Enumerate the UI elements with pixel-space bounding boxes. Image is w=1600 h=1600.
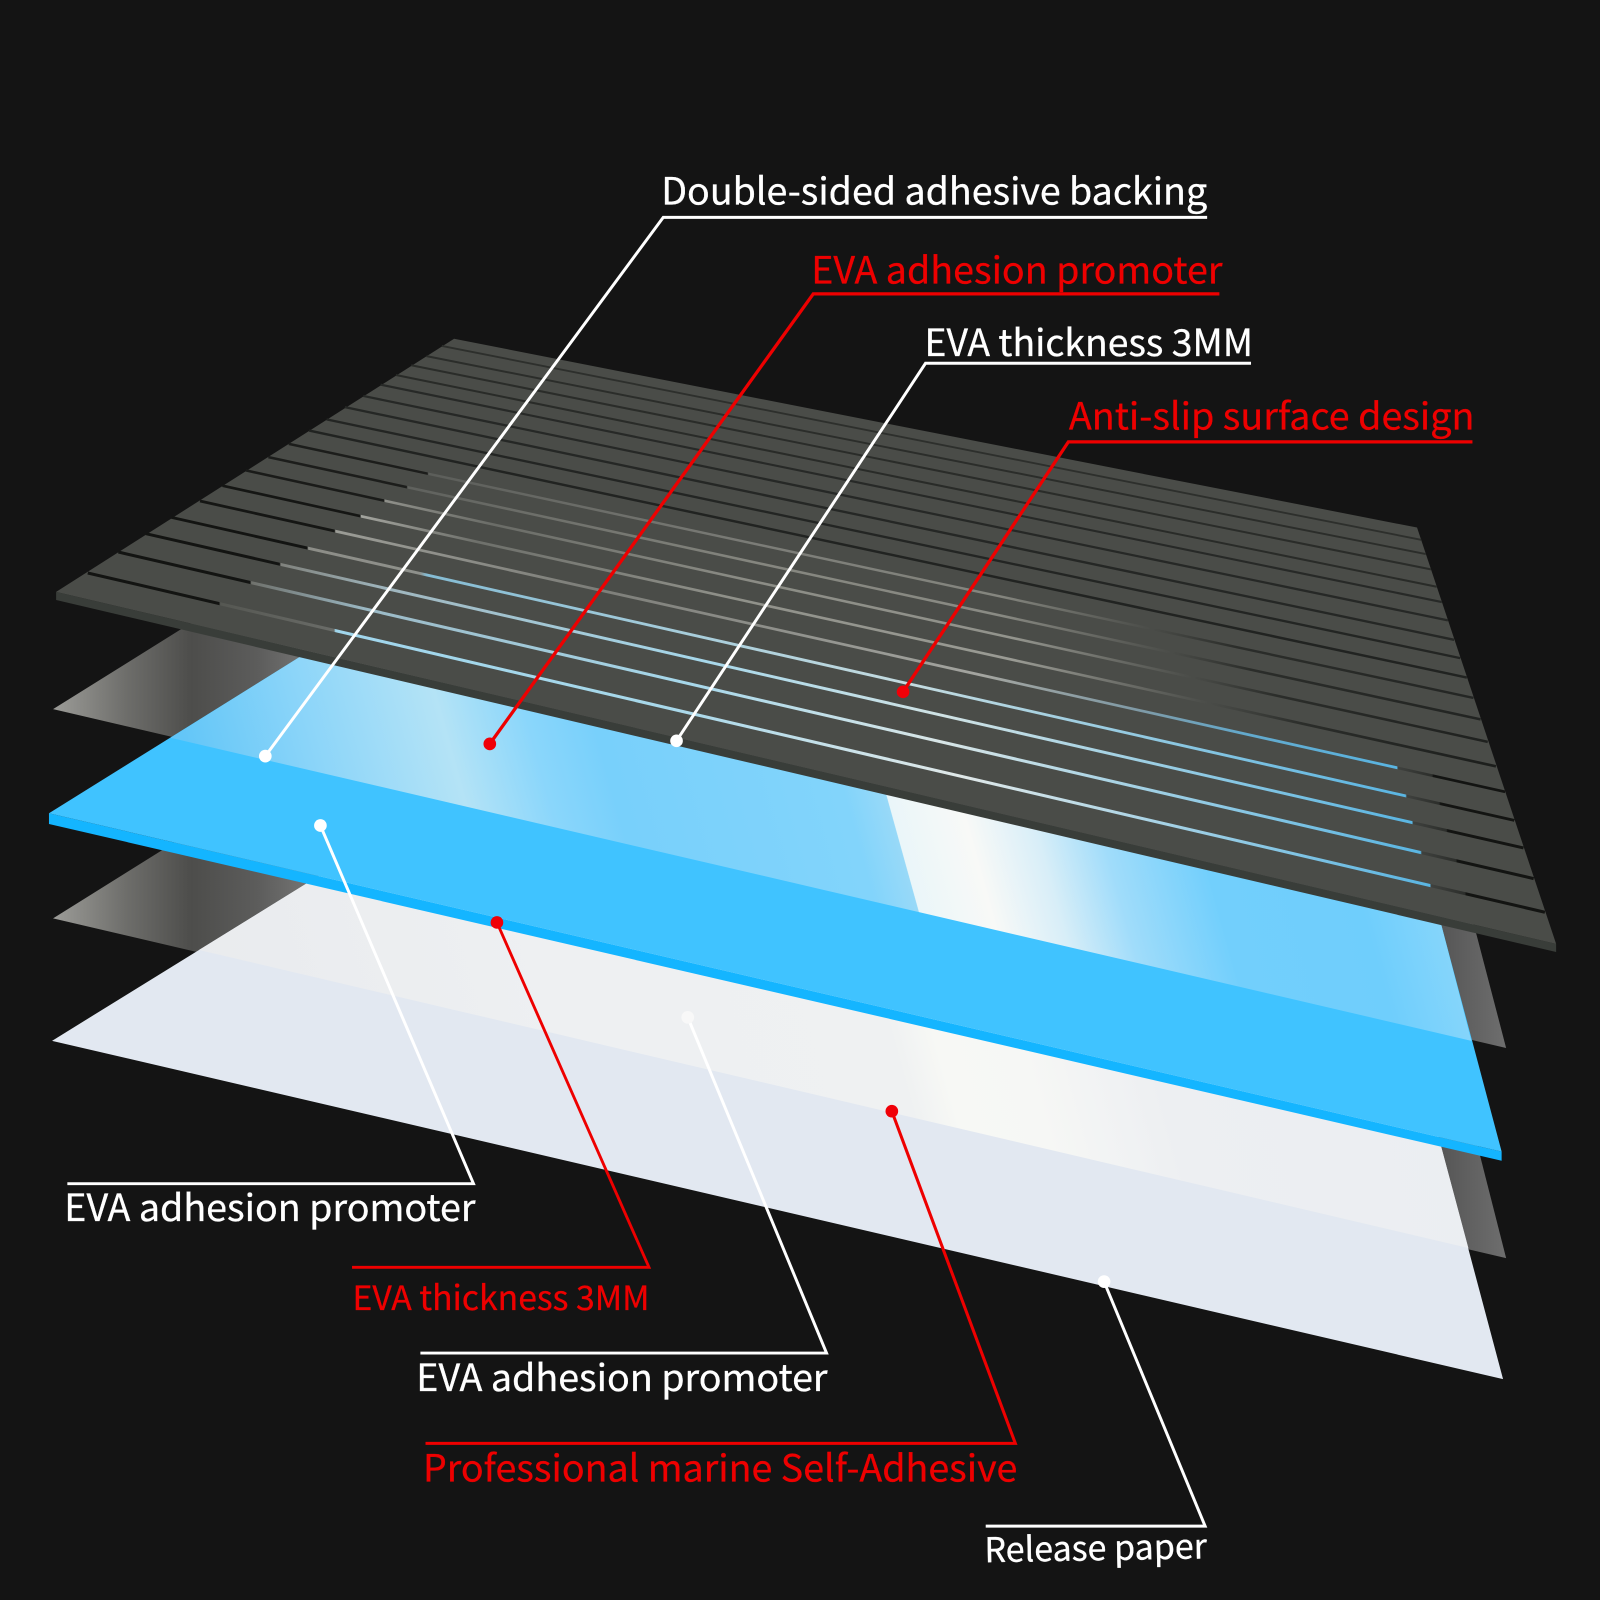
leader line: [352, 922, 649, 1267]
layer: lower grey adhesive sheet: [53, 760, 1506, 1258]
anchor dot: [681, 1011, 694, 1024]
anchor dot: [259, 750, 272, 762]
blue sheet top surface: [49, 656, 1502, 1152]
anchor dot: [314, 819, 327, 832]
blue sheet reflection band: [170, 656, 1471, 1041]
callout: EVA thickness 3MM (top, white): [670, 313, 1253, 747]
label: Anti-slip surface design: [1069, 387, 1474, 441]
callout: Professional marine Self-Adhesive: [423, 1105, 1017, 1493]
top sheet surface: [56, 339, 1556, 944]
callout: EVA thickness 3MM (lower, red): [352, 916, 649, 1320]
label: Double-sided adhesive backing: [661, 162, 1207, 216]
callout: Anti-slip surface design: [897, 387, 1474, 698]
label: EVA adhesion promoter: [64, 1178, 476, 1232]
release paper surface: [52, 865, 1503, 1379]
anchor dot: [886, 1105, 898, 1118]
callout: Release paper: [984, 1275, 1208, 1572]
anchor dot: [1098, 1275, 1110, 1288]
label: EVA adhesion promoter: [811, 241, 1223, 295]
top sheet front edge: [56, 592, 1556, 952]
label: Professional marine Self-Adhesive: [423, 1439, 1017, 1493]
leader line: [986, 1282, 1205, 1526]
label: EVA thickness 3MM: [353, 1271, 649, 1320]
callout: EVA adhesion promoter (second lower, white): [416, 1011, 828, 1402]
release paper reflection band: [199, 865, 1468, 1248]
anchor dot: [483, 738, 496, 750]
anchor dot: [897, 686, 909, 698]
leader line: [426, 1111, 1015, 1443]
layer: upper grey adhesive sheet: [53, 551, 1506, 1048]
layer: white release paper: [52, 865, 1503, 1379]
layer: dark anti-slip top sheet: [56, 339, 1556, 952]
leader line: [67, 826, 473, 1184]
leader line: [420, 1017, 827, 1353]
leader line: [265, 217, 1207, 756]
blue sheet front edge: [49, 813, 1502, 1161]
leader line: [490, 294, 1219, 744]
label: Release paper: [984, 1518, 1208, 1572]
callout: EVA adhesion promoter (top, red): [483, 241, 1223, 750]
callout: EVA adhesion promoter (lower, white): [64, 819, 476, 1232]
label: EVA thickness 3MM: [924, 313, 1253, 367]
callout: Double-sided adhesive backing: [259, 162, 1207, 762]
anchor dot: [491, 916, 503, 929]
anchor dot: [670, 734, 683, 747]
anti-slip grooves: [88, 346, 1545, 912]
leader line: [677, 363, 1251, 741]
leader line: [903, 442, 1472, 692]
label: EVA adhesion promoter: [416, 1348, 828, 1402]
layer: blue EVA foam sheet: [49, 656, 1502, 1161]
